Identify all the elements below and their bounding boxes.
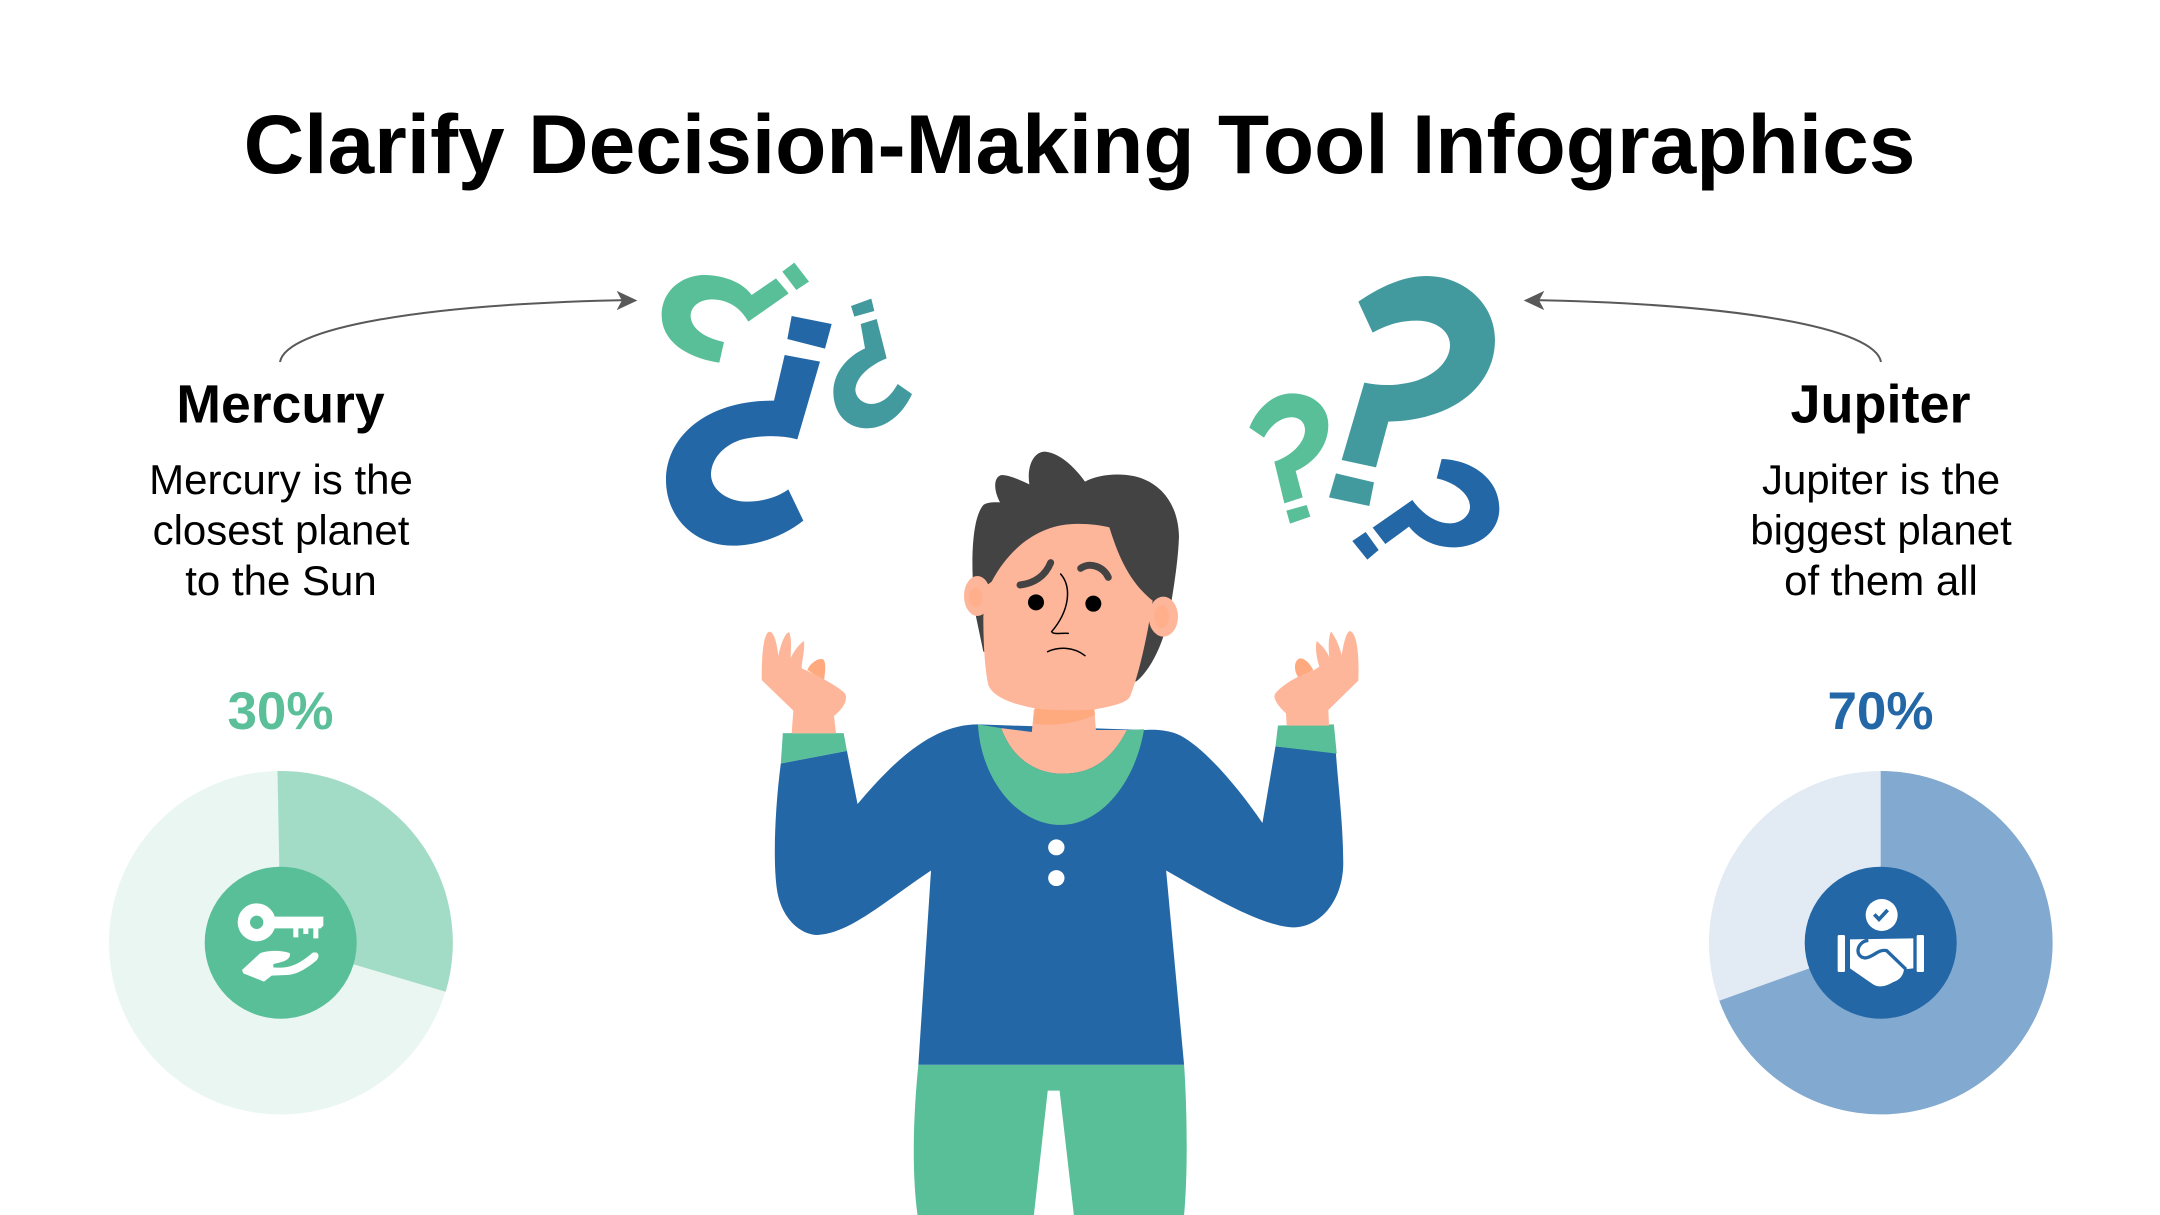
illustration: confused man	[762, 452, 1359, 1215]
icon: small teal question mark	[833, 299, 912, 428]
neck and chest	[1001, 709, 1127, 774]
chart: Jupiter 70% pie	[1709, 771, 2053, 1114]
icon: small green question mark	[1249, 393, 1328, 524]
face	[983, 524, 1153, 710]
left hand	[762, 632, 846, 733]
buttons	[1048, 839, 1064, 886]
neck shadow	[1033, 707, 1095, 725]
right hand	[1274, 631, 1359, 726]
icon: green question mark	[662, 263, 809, 363]
icon: handshake with check	[1838, 899, 1924, 986]
pants	[914, 1065, 1187, 1215]
text: Jupiter description: of them all	[1784, 557, 1978, 604]
question marks: right cluster	[1249, 276, 1499, 560]
heading: Jupiter: Jupiter	[1790, 374, 1971, 434]
heading: Mercury: Mercury	[176, 376, 385, 434]
arrow: Mercury to question marks	[280, 293, 635, 362]
panel: Mercury	[109, 293, 635, 1114]
eyes	[1028, 594, 1101, 612]
eyebrows	[1020, 563, 1108, 585]
arrow: Jupiter to question marks	[1526, 293, 1881, 362]
icon: key and hand	[238, 903, 323, 982]
collar	[978, 724, 1144, 825]
text: Mercury description: to the Sun	[185, 557, 377, 604]
body: clothes	[775, 709, 1343, 1215]
shirt	[775, 724, 1343, 1065]
left ear	[964, 576, 991, 616]
icon: small blue question mark	[1352, 459, 1499, 560]
icon: large blue question mark	[666, 316, 832, 546]
percentage: 70%: 70%	[1827, 682, 1934, 741]
panel: Jupiter	[1526, 293, 2053, 1114]
hair	[972, 452, 1179, 682]
right ear	[1149, 597, 1178, 637]
question marks: left cluster	[662, 263, 912, 546]
left cuff	[781, 733, 847, 763]
head	[964, 452, 1179, 725]
text: Jupiter description: Jupiter is the	[1762, 456, 2000, 503]
icon: large teal question mark	[1329, 276, 1495, 506]
text: Jupiter description: biggest planet	[1750, 506, 2012, 554]
title: Clarify Decision-Making Tool Infographics	[244, 97, 1915, 191]
percentage: 30%: 30%	[227, 682, 334, 741]
nose and mouth	[1048, 574, 1085, 656]
chart: Mercury 30% pie	[109, 771, 453, 1114]
text: Mercury description: closest planet	[153, 506, 410, 554]
text: Mercury description: Mercury is the	[149, 456, 413, 503]
right cuff	[1276, 724, 1337, 754]
